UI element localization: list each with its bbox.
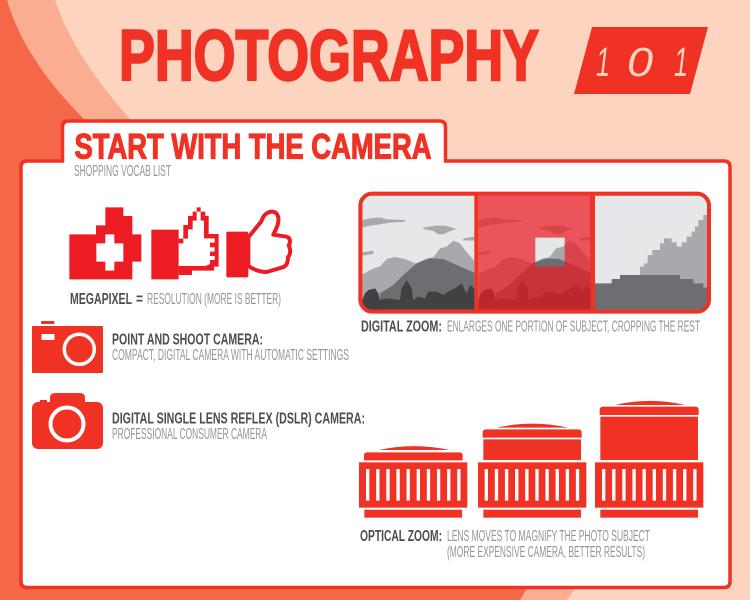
megapixel label: RESOLUTION (MORE IS BETTER): [147, 291, 281, 308]
optical zoom label: OPTICAL ZOOM:: [360, 528, 442, 545]
badge: 101: 1: [674, 39, 688, 85]
megapixel label: MEGAPIXEL: [70, 291, 132, 308]
text: point and shoot camera: COMPACT, DIGITAL CAMERA WITH AUTOMATIC SETTINGS: [112, 347, 349, 364]
illustration: optical zoom lenses: [359, 401, 703, 518]
title: PHOTOGRAPHY: [119, 17, 539, 96]
text: point and shoot camera: POINT AND SHOOT CAMERA:: [112, 332, 263, 348]
optical zoom label: [360, 528, 650, 561]
text: point and shoot camera: [112, 332, 349, 364]
heading: START WITH THE CAMERA: [74, 128, 432, 166]
digital zoom label: [361, 318, 700, 336]
badge: 101: [574, 27, 708, 94]
megapixel label: =: [136, 291, 143, 308]
panel: start with the camera: [21, 121, 730, 588]
panel: original scene: [362, 196, 474, 310]
panel: cropped region highlighted: [478, 196, 591, 310]
megapixel label: [70, 291, 281, 308]
text: DSLR camera: DIGITAL SINGLE LENS REFLEX (DSLR) CAMERA:: [112, 410, 365, 428]
badge: 101: 1: [596, 39, 610, 85]
panel: enlarged crop: [595, 196, 707, 310]
icon: point and shoot camera: [32, 321, 103, 373]
text: DSLR camera: PROFESSIONAL CONSUMER CAMERA: [112, 426, 267, 443]
lens: fully extended: [595, 401, 703, 518]
digital zoom label: DIGITAL ZOOM:: [361, 318, 442, 336]
lens: retracted: [359, 446, 467, 518]
illustration: digital zoom panels: [358, 192, 711, 313]
text: DSLR camera: [112, 410, 365, 443]
badge: 101: 0: [627, 39, 653, 85]
subheading: SHOPPING VOCAB LIST: [74, 163, 171, 180]
lens: partly extended: [478, 424, 586, 518]
icon: three thumbs up, increasing resolution: [69, 207, 290, 279]
icon: DSLR camera: [32, 393, 103, 449]
